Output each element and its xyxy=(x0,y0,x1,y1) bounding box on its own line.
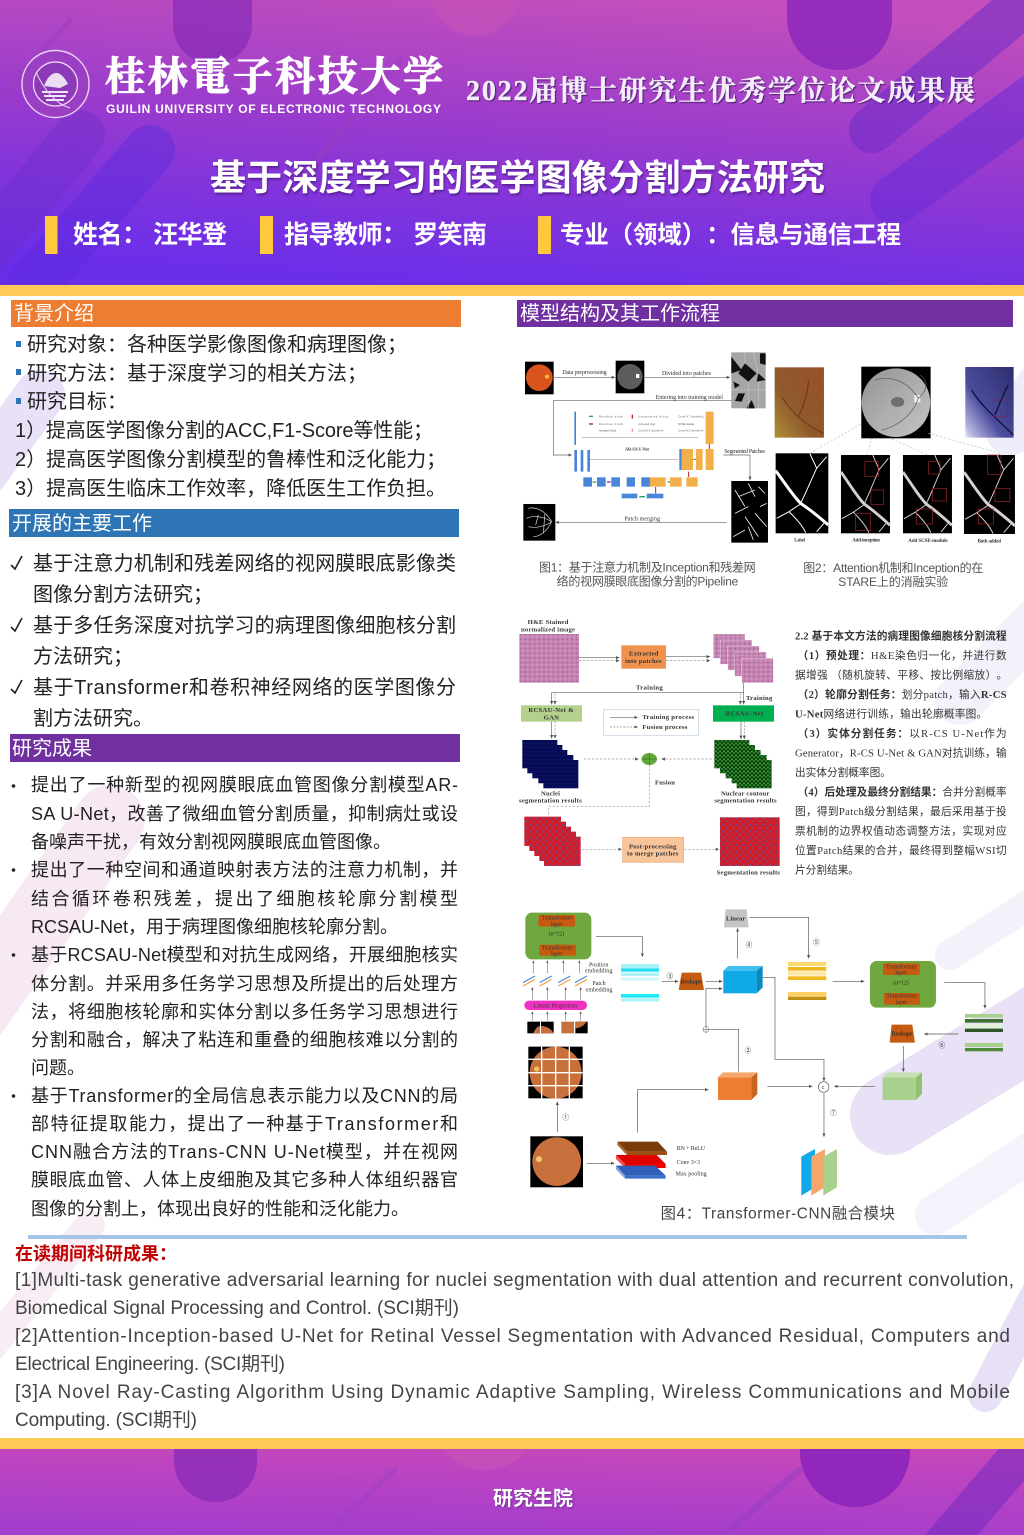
figure 1: pipeline: Residual block xyxy=(599,422,624,426)
text block: publications: Electrical Engineering. (SCI期刊) xyxy=(15,1353,285,1375)
text block: pathology steps: Generator，R-CS U-Net & GAN对抗训练，输 xyxy=(795,747,1007,760)
text block: main work: 图像分割方法研究； xyxy=(33,583,213,606)
figure 4: transformer-cnn diagram: ③ xyxy=(667,972,674,980)
text block: pathology steps: （1）预处理：H&E染色归一化，并进行数 xyxy=(798,649,1007,662)
heading: results xyxy=(10,734,460,762)
figure 1: pipeline: SCSE module xyxy=(678,422,695,426)
bottom yellow band xyxy=(0,1438,1024,1449)
divider xyxy=(28,1235,967,1239)
left transformer block xyxy=(525,913,591,959)
text block: pathology steps: 位置Patch结果的合并，最终得到整幅WSI切 xyxy=(795,844,1007,857)
text block: background: 3）提高医生临床工作效率，降低医生工作负担。 xyxy=(15,477,446,500)
caption: figure 1: 图1：基于注意力机制及Inception和残差网 xyxy=(539,560,756,575)
figure 4: transformer-cnn diagram: Linear Projection xyxy=(534,1003,577,1009)
figure 4: transformer-cnn diagram xyxy=(523,909,1003,1196)
figure 1: pipeline: Entering into training model xyxy=(656,395,723,401)
left transformer block: layer xyxy=(551,922,562,928)
figure 1: pipeline: Segmented Patches xyxy=(724,449,766,455)
caption: figure 4: 图4：Transformer-CNN融合模块 xyxy=(661,1205,895,1222)
text block: pathology steps: 出实体分割概率图。 xyxy=(795,766,891,779)
figure 1: pipeline: Conv7×7 (stride=1) xyxy=(678,414,704,418)
author info row: 指导教师： 罗笑南 xyxy=(284,221,487,249)
caption: figure 1 xyxy=(539,560,756,589)
text block: results: 体分割。并采用多任务学习思想及所提出的后处理方 xyxy=(31,974,458,994)
caption: figure 2 xyxy=(803,560,983,589)
figure 4: transformer-cnn diagram: Reshape xyxy=(892,1031,913,1037)
right transformer block: Transformer xyxy=(886,963,917,970)
text block: main work: 方法研究； xyxy=(33,645,133,668)
text block: results xyxy=(12,775,458,1219)
figure 3: pathology flow: RCSAU-Net xyxy=(726,711,764,718)
heading: background xyxy=(11,300,461,327)
page background shapes xyxy=(0,360,1024,1395)
figure 1: pipeline: Data preprocessing xyxy=(562,370,607,376)
text block: results: RCSAU-Net，用于病理图像细胞核轮廓分割。 xyxy=(31,917,398,937)
figure 3: pathology flow: Training xyxy=(746,695,773,702)
text block: results: 提出了一种新型的视网膜眼底血管图像分割模型AR- xyxy=(31,775,458,795)
figure 4: transformer-cnn diagram: ② xyxy=(745,1047,752,1055)
figure 1: pipeline: copy and crop xyxy=(638,422,656,426)
figure 2: ablation experiment: Label xyxy=(794,539,806,544)
text block: publications: [1]Multi-task generative adversarial learning for nuclei segmentation with dual attention and recurrent convolution, xyxy=(15,1270,1014,1291)
caption: figure 2: 图2：Attention机制和Inception的在 xyxy=(803,560,983,575)
heading: background: 背景介绍 xyxy=(14,302,94,325)
title: 基于深度学习的医学图像分割方法研究 xyxy=(210,157,825,198)
figure 3: pathology flow: to merge patches xyxy=(627,851,679,858)
figure 4: transformer-cnn diagram: Position xyxy=(589,962,608,968)
figure 3: pathology flow xyxy=(519,619,780,877)
top yellow band xyxy=(0,285,1024,296)
text block: pathology steps: 据增强 （随机旋转、平移、按比例缩放）。 xyxy=(795,668,1007,681)
figure 3: pathology flow: GAN xyxy=(544,714,559,721)
text block: background: 研究对象：各种医学影像图像和病理图像； xyxy=(27,333,407,356)
text block: pathology steps: 图，得到Patch级分割结果，最后采用基于投 xyxy=(795,805,1007,818)
text block: pathology steps: （3）实体分割任务：以R-CS U-Net作为 xyxy=(798,727,1007,740)
text block: results: 基于Transformer的全局信息表示能力以及CNN的局 xyxy=(31,1086,458,1106)
text block: pathology steps: （4）后处理及最终分割结果：合并分割概率 xyxy=(798,786,1007,799)
heading: publications: 在读期间科研成果： xyxy=(15,1243,177,1264)
text block: publications: Biomedical Signal Processing and Control. (SCI期刊) xyxy=(15,1297,459,1319)
author info row: 姓名： 汪华登 xyxy=(73,221,227,249)
text block: main work xyxy=(11,552,456,730)
caption: figure 2: STARE上的消融实验 xyxy=(838,574,948,589)
figure 3: pathology flow: Nuclei xyxy=(541,791,560,798)
text block: results: 膜眼底血管、人体上皮细胞及其它多种人体组织器官 xyxy=(31,1170,458,1190)
figure 3: pathology flow: Fusion xyxy=(655,780,675,787)
text block: main work: 基于多任务深度对抗学习的病理图像细胞核分割 xyxy=(33,614,456,637)
figure 4: transformer-cnn diagram: Linear xyxy=(726,915,745,922)
figure 1: pipeline: AR-SA U-Net xyxy=(625,447,650,452)
text block: results: 图像的分割上，体现出良好的性能和泛化能力。 xyxy=(31,1199,409,1219)
text block: main work: 基于注意力机制和残差网络的视网膜眼底影像类 xyxy=(33,552,456,575)
figure 4: transformer-cnn diagram: BN + ReLU xyxy=(677,1146,706,1152)
figure 4: transformer-cnn diagram: c xyxy=(822,1085,825,1091)
text block: background: 研究方法：基于深度学习的相关方法； xyxy=(27,362,367,385)
figure 4: transformer-cnn diagram: embedding xyxy=(586,987,612,993)
figure 3: pathology flow: into patches xyxy=(625,658,662,665)
university name: GUILIN UNIVERSITY OF ELECTRONIC TECHNOLOGY xyxy=(106,102,441,116)
figure 4: transformer-cnn diagram: Reshape xyxy=(681,979,702,985)
figure 2: ablation experiment: Add SCSE-module xyxy=(908,539,948,544)
figure 1: pipeline: Inception block xyxy=(599,429,617,433)
text block: results: 部特征提取能力，提出了一种基于Transformer和 xyxy=(31,1114,458,1134)
text block: publications xyxy=(15,1270,1014,1431)
figure 1: pipeline: Upsampled block xyxy=(638,414,669,418)
text block: results: 备噪声干扰，有效分割视网膜眼底血管图像。 xyxy=(31,832,391,852)
figure 3: pathology flow: Nuclear contour xyxy=(721,791,769,798)
figure 4: transformer-cnn diagram: Patch xyxy=(592,981,606,987)
figure 2: ablation experiment xyxy=(775,367,1015,544)
text block: pathology steps: U-Net网络进行训练，输出轮廓概率图。 xyxy=(795,708,987,721)
figure 1: pipeline xyxy=(523,352,768,543)
heading: main work xyxy=(9,509,459,537)
figure 2: ablation experiment: Both added xyxy=(978,539,1001,544)
figure 3: pathology flow: Training process xyxy=(642,714,694,721)
figure 2: ablation experiment: Add-inception xyxy=(852,539,880,544)
figure 1: pipeline: Conv3×3 (stride=1) xyxy=(638,428,664,432)
university logo emblem xyxy=(22,50,89,118)
left transformer block: (n=12) xyxy=(549,931,564,938)
text block: pathology steps: （2）轮廓分割任务：划分patch，输入R-CS xyxy=(798,688,1007,701)
figure 3: pathology flow: Extracted xyxy=(629,651,659,658)
text block: main work: 基于Transformer和卷积神经网络的医学图像分 xyxy=(33,676,456,699)
text block: background xyxy=(15,333,446,500)
figure 4: transformer-cnn diagram: ⑤ xyxy=(813,938,820,946)
text block: background: 2）提高医学图像分割模型的鲁棒性和泛化能力； xyxy=(15,448,446,471)
text block: results: 分割和融合，解决了粘连和重叠的细胞核难以分割的 xyxy=(31,1030,458,1050)
heading: main work: 开展的主要工作 xyxy=(12,512,152,535)
text block: publications: [3]A Novel Ray-Casting Algorithm Using Dynamic Adaptive Sampling, Wireless Communications and Mobile xyxy=(15,1382,1010,1403)
left transformer block: Transformer xyxy=(542,915,572,922)
text block: publications: [2]Attention-Inception-based U-Net for Retinal Vessel Segmentation with Advanced Residual, Computers and xyxy=(15,1326,1010,1347)
caption: figure 1: 络的视网膜眼底图像分割的Pipeline xyxy=(557,574,739,589)
text block: pathology steps: 2.2 基于本文方法的病理图像细胞核分割流程 xyxy=(795,630,1007,643)
figure 1: pipeline: Residual block xyxy=(599,414,624,418)
figure 4: transformer-cnn diagram: ⑦ xyxy=(830,1109,837,1117)
heading: model structure: 模型结构及其工作流程 xyxy=(520,302,720,325)
text block: background: 1）提高医学图像分割的ACC,F1-Score等性能； xyxy=(15,419,433,442)
figure 3: pathology flow: RCSAU-Net & xyxy=(528,707,574,714)
figure 4: transformer-cnn diagram: ④ xyxy=(746,941,753,949)
text block: results: 问题。 xyxy=(31,1058,85,1078)
figure 4: transformer-cnn diagram: Max pooling xyxy=(676,1171,707,1177)
figure 1: pipeline: Divided into patches xyxy=(662,371,712,377)
figure 3: pathology flow: Post-processing xyxy=(629,843,677,850)
text block: results: CNN融合方法的Trans-CNN U-Net模型，并在视网 xyxy=(31,1142,458,1162)
text block: pathology steps: 片分割结果。 xyxy=(795,863,859,876)
text block: results: SA U-Net，改善了微细血管分割质量，抑制病灶或设 xyxy=(31,804,458,824)
figure 4: transformer-cnn diagram: ⑥ xyxy=(939,1042,946,1050)
exhibition heading: 2022届博士研究生优秀学位论文成果展 xyxy=(466,75,975,107)
text block: results: 基于RCSAU-Net模型和对抗生成网络，开展细胞核实 xyxy=(31,945,458,965)
figure 1: pipeline: Conv3×3 (stride=1) xyxy=(678,429,704,433)
footer banner xyxy=(0,1449,1024,1535)
figure 3: pathology flow: normalized image xyxy=(521,626,575,633)
text block: background: 研究目标： xyxy=(27,390,127,413)
author info row: 专业（领域）：信息与通信工程 xyxy=(560,222,901,249)
right transformer block: (n=12) xyxy=(893,979,909,986)
figure 3: pathology flow: segmentation results xyxy=(714,798,777,805)
figure 4: transformer-cnn diagram: embedding xyxy=(585,969,612,975)
footer label: 研究生院 xyxy=(493,1486,573,1510)
figure 3: pathology flow: H&E Stained xyxy=(528,619,569,626)
text block: results: 提出了一种空间和通道映射表方法的注意力机制，并 xyxy=(31,860,458,880)
heading: model structure xyxy=(517,300,1013,327)
figure 3: pathology flow: segmentation results xyxy=(519,798,582,805)
text block: publications: Computing. (SCI期刊) xyxy=(15,1409,197,1431)
text block: pathology steps xyxy=(795,630,1007,876)
author info row xyxy=(45,216,901,254)
text block: pathology steps: 票机制的边界权值动态调整方法，实现对应 xyxy=(795,824,1007,837)
right transformer block: layer xyxy=(896,1000,907,1006)
heading: results: 研究成果 xyxy=(12,737,92,760)
figure 3: pathology flow: Training xyxy=(636,684,663,691)
right transformer block xyxy=(870,961,936,1008)
left transformer block: layer xyxy=(551,951,562,957)
right transformer block: Transformer xyxy=(886,993,917,1000)
text block: results: 结合循环卷积残差，提出了细胞核轮廓分割模型 xyxy=(31,889,458,909)
figure 3: pathology flow: Fusion process xyxy=(642,724,688,731)
right transformer block: layer xyxy=(895,970,907,976)
header banner xyxy=(0,0,1024,300)
figure 4: transformer-cnn diagram: ① xyxy=(562,1113,569,1121)
figure 4: transformer-cnn diagram: Conv 3×3 xyxy=(677,1160,700,1166)
text block: results: 法，将细胞核轮廓和实体分割以多任务学习思想进行 xyxy=(31,1002,458,1022)
figure 3: pathology flow: Segmentation results xyxy=(717,870,780,877)
figure 1: pipeline: Patch merging xyxy=(624,517,660,523)
text block: main work: 割方法研究。 xyxy=(33,707,153,730)
left transformer block: Transformer xyxy=(542,944,572,951)
university name: 桂林電子科技大学 xyxy=(105,45,443,102)
